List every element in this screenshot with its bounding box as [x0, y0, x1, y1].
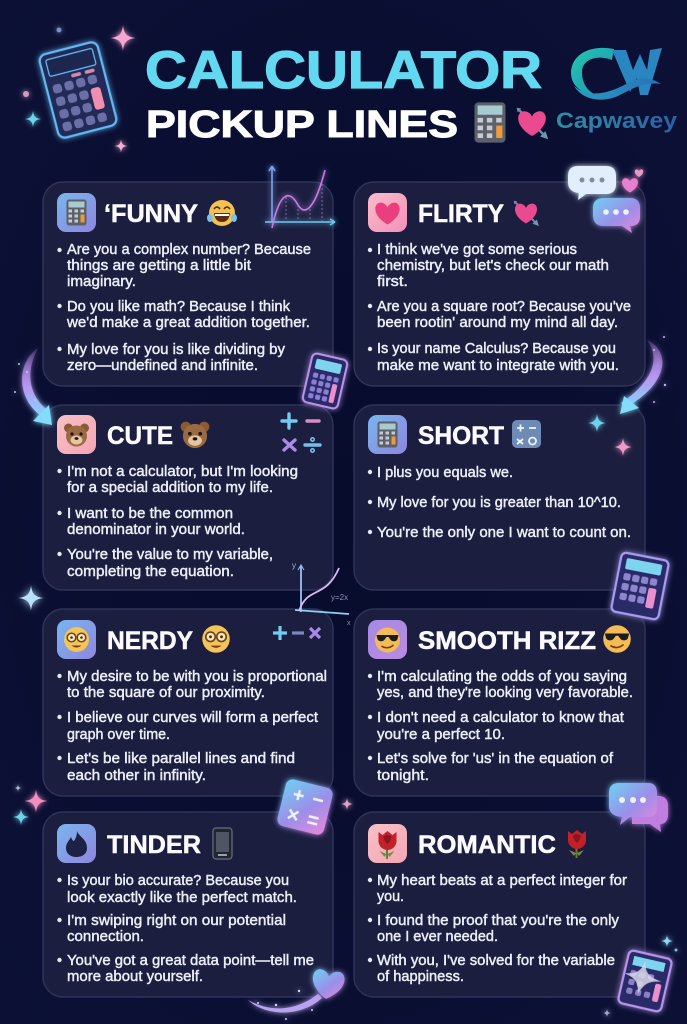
list: cute lines: completing the equation.	[67, 564, 234, 580]
logo: capwavey: Capwavey	[556, 108, 678, 133]
list: tinder lines: I'm swiping right on our potential	[67, 913, 286, 929]
list: tinder lines: Is your bio accurate? Because you	[67, 873, 289, 889]
list: romantic lines: you.	[377, 889, 404, 905]
list: romantic lines	[368, 873, 627, 985]
list: short lines: I plus you equals we.	[377, 465, 513, 481]
list: nerdy lines: each other in infinity.	[67, 768, 206, 784]
list: short lines	[368, 465, 631, 541]
graph: cute to nerdy: y=2x	[331, 593, 348, 602]
icon: calculator tile	[57, 193, 96, 232]
icon: phone emoji	[213, 828, 232, 859]
list: romantic lines: I found the proof that you're the only	[377, 913, 620, 929]
list: funny lines	[57, 242, 311, 374]
list: cute lines: You're the value to my variable,	[67, 547, 273, 563]
icon: sunglasses emoji	[603, 625, 631, 653]
list: tinder lines: look exactly like the perfect match.	[67, 890, 297, 906]
icon: title heart emoji	[517, 108, 548, 139]
icon: sunglasses tile	[368, 620, 407, 659]
list: nerdy lines: I believe our curves will form a perfect	[67, 710, 318, 726]
icon: flame tile	[57, 824, 96, 863]
title	[145, 41, 542, 146]
list: funny lines: we'd make a great addition together.	[66, 315, 310, 331]
list: tinder lines	[57, 873, 314, 985]
list: flirty lines: been rootin' around my mind all day.	[377, 315, 618, 331]
list: smooth rizz lines: Let's solve for 'us' in the equation of	[377, 751, 614, 767]
list: smooth rizz lines: I don't need a calculator to know that	[377, 710, 624, 726]
icon: bear tile	[57, 415, 96, 454]
sparkles: bottom right	[603, 935, 678, 1017]
icon: chat bubbles lower	[609, 783, 668, 832]
list: smooth rizz lines: tonight.	[377, 768, 429, 784]
sparkles: header	[23, 26, 136, 152]
logo: capwavey	[556, 48, 678, 133]
list: nerdy lines	[57, 669, 327, 784]
list: flirty lines	[368, 242, 631, 374]
icon: heart with swoosh	[248, 968, 346, 1020]
list: smooth rizz lines	[368, 669, 633, 784]
icon: plus minus times	[273, 626, 320, 640]
list: nerdy lines: My desire to be with you is proportional	[67, 669, 327, 685]
graph: funny	[265, 166, 335, 228]
list: cute lines: denominator in your world.	[67, 522, 245, 538]
icon: bear emoji	[181, 422, 209, 448]
list: smooth rizz lines: you're a perfect 10.	[377, 727, 505, 743]
list: funny lines: zero—undefined and infinite.	[67, 358, 258, 374]
list: nerdy lines: graph over time.	[67, 727, 170, 743]
list: nerdy lines: Let's be like parallel lines and find	[67, 751, 295, 767]
graph: cute to nerdy: y	[292, 561, 296, 570]
list: nerdy lines: to the square of our proximity.	[67, 685, 265, 701]
list: funny lines: imaginary.	[67, 274, 136, 290]
icon: small calculator funny	[302, 353, 348, 409]
list: funny lines: Are you a complex number? Because	[67, 242, 311, 258]
heading: nerdy: NERDY	[107, 627, 193, 655]
list: smooth rizz lines: I'm calculating the odds of you saying	[377, 669, 627, 685]
list: funny lines: things are getting a little bit	[67, 258, 251, 274]
graph: cute to nerdy	[292, 561, 351, 627]
arrow: right swoosh	[620, 336, 666, 414]
list: tinder lines: You've got a great data point—tell me	[67, 953, 314, 969]
sparkles: left lower	[13, 784, 353, 825]
icon: neon calculator short	[611, 552, 669, 620]
sparkle: left middle	[18, 586, 44, 610]
list: flirty lines: Are you a square root? Because you've	[377, 299, 631, 315]
heading: cute: CUTE	[107, 422, 173, 450]
graph: cute to nerdy: x	[347, 620, 351, 627]
icon: laughing emoji	[207, 200, 237, 226]
list: romantic lines: With you, I've solved for the variable	[377, 953, 615, 969]
list: romantic lines: My heart beats at a perfect integer for	[377, 873, 627, 889]
list: tinder lines: more about yourself.	[67, 969, 203, 985]
list: romantic lines: of happiness.	[377, 969, 464, 985]
list: funny lines: My love for you is like dividing by	[67, 342, 286, 358]
panel: smooth rizz	[354, 609, 645, 796]
title: CALCULATOR	[145, 41, 542, 100]
list: short lines: My love for you is greater than 10^10.	[377, 495, 621, 511]
heading: funny: ‘FUNNY	[104, 200, 198, 228]
heading: romantic: ROMANTIC	[418, 831, 556, 859]
list: cute lines: I want to be the common	[67, 506, 233, 522]
arrow: left swoosh	[14, 348, 52, 425]
list: flirty lines: make me want to integrate with you.	[377, 358, 619, 374]
list: cute lines	[57, 464, 298, 580]
heading: short: SHORT	[418, 422, 504, 450]
icon: chat bubbles top	[568, 166, 643, 233]
list: cute lines: I'm not a calculator, but I'm looking	[67, 464, 298, 480]
list: flirty lines: first.	[377, 274, 408, 290]
icon: heart tile	[368, 193, 407, 232]
list: flirty lines: Is your name Calculus? Because you	[377, 341, 616, 357]
heading: smooth rizz: SMOOTH RIZZ	[418, 627, 596, 655]
list: smooth rizz lines: yes, and they're looking very favorable.	[377, 685, 633, 701]
icon: neon calculator	[38, 41, 118, 139]
panel: cute	[43, 405, 333, 590]
sparkles: short	[588, 414, 632, 456]
list: cute lines: for a special addition to my life.	[67, 480, 273, 496]
list: tinder lines: connection.	[67, 929, 144, 945]
title: PICKUP LINES	[146, 104, 458, 146]
icon: neon calculator romantic	[617, 950, 673, 1012]
heading: tinder: TINDER	[107, 831, 201, 859]
icon: math operators tile	[512, 420, 541, 448]
list: romantic lines: one I ever needed.	[377, 929, 498, 945]
icon: heart with arrow	[514, 201, 539, 226]
icon: nerd emoji	[202, 625, 230, 653]
list: funny lines: Do you like math? Because I think	[67, 299, 291, 315]
icon: calculator tile	[368, 415, 407, 454]
panel: tinder	[43, 812, 333, 997]
panel: nerdy	[43, 609, 333, 796]
list: short lines: You're the only one I want to count on.	[377, 525, 631, 541]
list: flirty lines: chemistry, but let's check our math	[377, 258, 609, 274]
heading: flirty: FLIRTY	[418, 200, 504, 228]
panel: romantic	[354, 812, 645, 997]
panel: short	[354, 405, 645, 590]
panel: flirty	[354, 182, 645, 386]
icon: title calculator emoji	[474, 102, 506, 143]
icon: rose emoji	[568, 830, 586, 858]
icon: rose tile	[368, 824, 407, 863]
list: flirty lines: I think we've got some serious	[377, 242, 577, 258]
icon: math operators cute	[282, 414, 320, 451]
icon: math tile	[276, 778, 334, 836]
panel: funny	[43, 182, 333, 386]
icon: nerd tile	[57, 620, 96, 659]
